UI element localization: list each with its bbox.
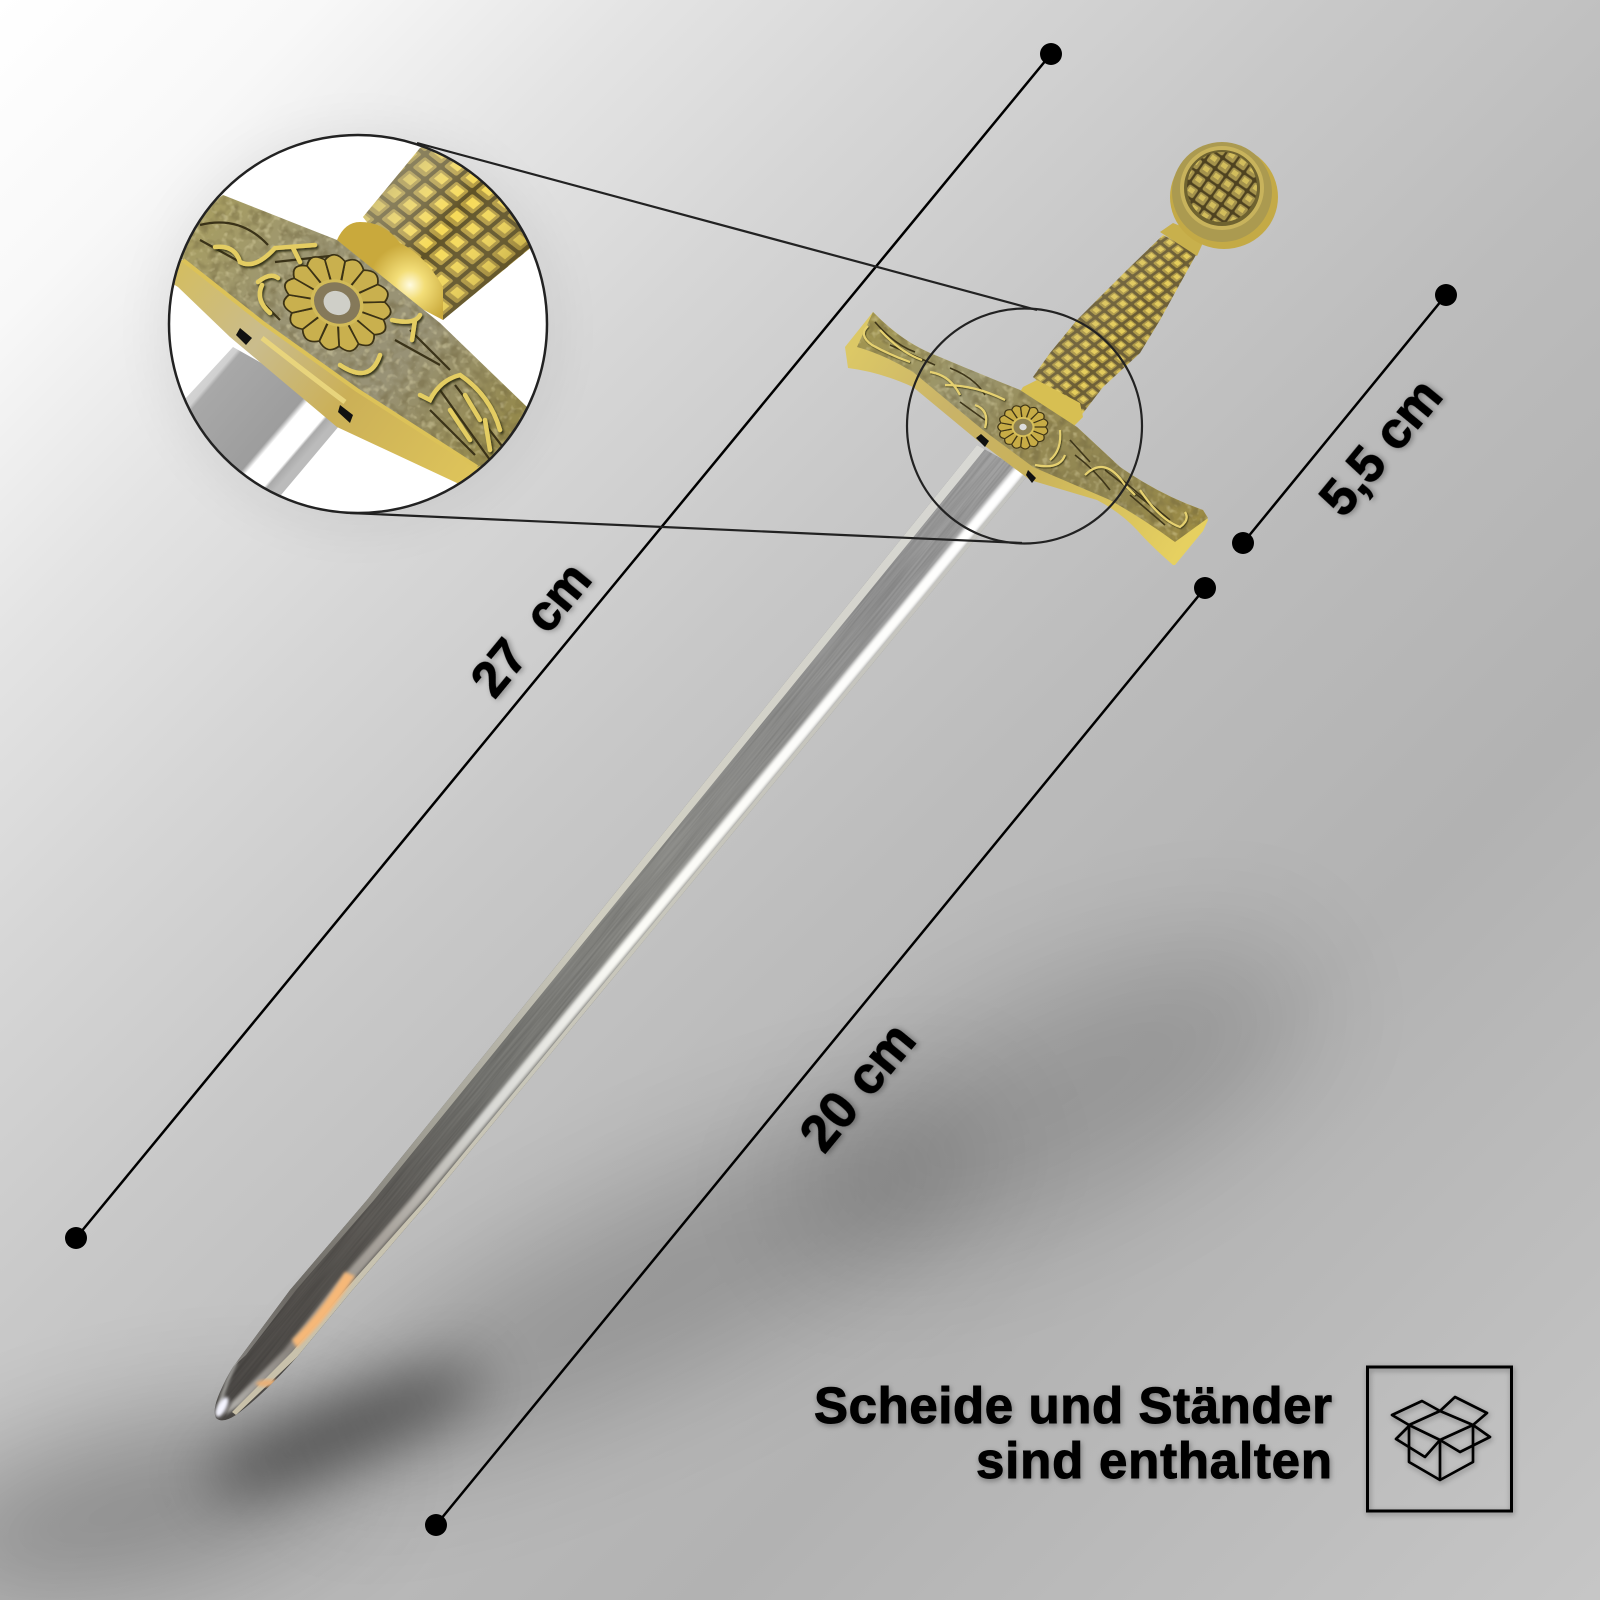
note: scabbard and stand included bbox=[814, 1377, 1332, 1489]
note: scabbard and stand included: sind enthalten bbox=[976, 1432, 1332, 1489]
label: 27 cm: 27 cm bbox=[460, 551, 602, 707]
inset collar bbox=[337, 222, 443, 320]
label: 20 cm: 20 cm bbox=[789, 1012, 927, 1163]
sword bbox=[53, 142, 1278, 1579]
grip bbox=[1033, 223, 1206, 417]
inset guard decorated face bbox=[160, 190, 530, 470]
inset grip bbox=[363, 147, 530, 320]
inset blade slot marks bbox=[236, 328, 252, 345]
dimension line: total length 27 cm bbox=[65, 43, 1062, 1249]
label: 5,5 cm: 5,5 cm bbox=[1308, 367, 1453, 526]
magnifier circle on crossguard bbox=[907, 308, 1142, 544]
crossguard bbox=[840, 300, 1215, 565]
blade bbox=[214, 445, 1026, 1420]
inset: crossguard detail bbox=[150, 120, 548, 520]
pommel bbox=[1170, 142, 1278, 249]
inset flower bbox=[282, 254, 392, 352]
dimension line: width 5,5 cm bbox=[1232, 284, 1457, 554]
icon: open box in frame bbox=[1368, 1367, 1512, 1511]
note: scabbard and stand included: Scheide und Ständer bbox=[814, 1377, 1332, 1434]
dimension line: blade length 20 cm bbox=[425, 577, 1216, 1536]
inset blade bbox=[186, 347, 338, 495]
connector lines from magnifier to inset bbox=[350, 143, 1037, 543]
inset guard side face bbox=[174, 260, 482, 484]
flower bbox=[988, 397, 1058, 458]
blade reflections bbox=[292, 1272, 355, 1348]
collar bbox=[1020, 380, 1083, 427]
